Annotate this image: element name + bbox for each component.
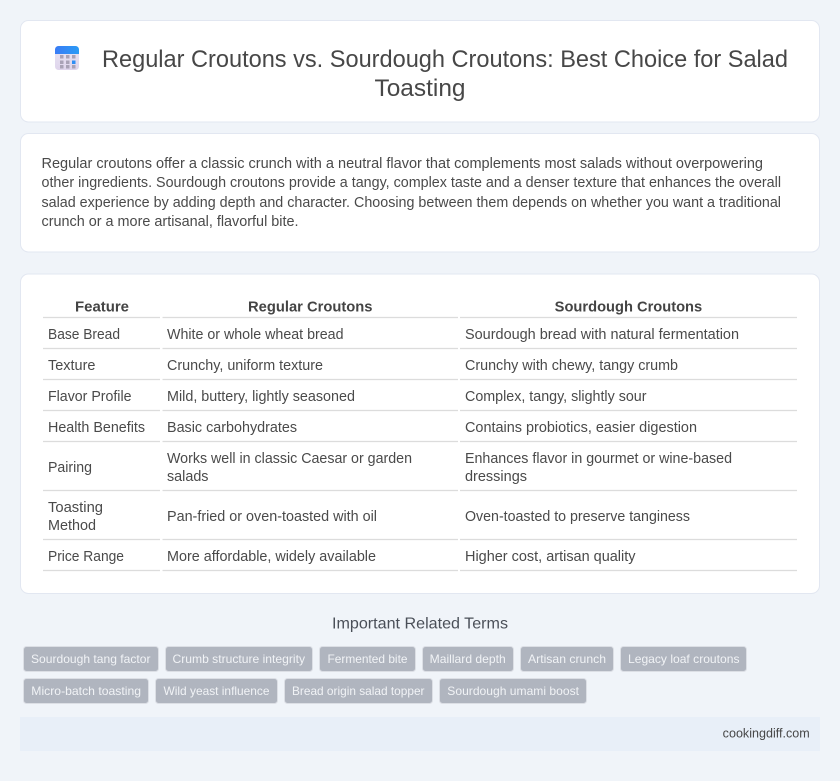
tag: artisan crunch xyxy=(520,646,614,672)
table header row: Sourdough Croutons xyxy=(555,300,702,316)
row: health benefits: Health Benefits xyxy=(48,420,145,436)
tag: bread origin salad topper: Bread origin salad topper xyxy=(292,684,424,698)
row: health benefits xyxy=(48,420,697,436)
tag: sourdough umami boost: Sourdough umami boost xyxy=(447,684,580,698)
heading: important related terms: Important Related Terms xyxy=(332,616,508,633)
row: pairing: Enhances flavor in gourmet or wine-based xyxy=(465,451,732,467)
row: toasting method: Pan-fried or oven-toasted with oil xyxy=(167,509,377,525)
row: flavor profile xyxy=(48,389,647,405)
table header row: Regular Croutons xyxy=(248,300,372,316)
panel: description xyxy=(20,134,820,252)
row: health benefits: Basic carbohydrates xyxy=(167,420,297,436)
tag: micro-batch toasting: Micro-batch toasting xyxy=(31,684,141,698)
tag: bread origin salad topper xyxy=(284,678,432,704)
row: texture: Texture xyxy=(48,358,96,374)
row: base bread: White or whole wheat bread xyxy=(167,327,344,343)
tag: fermented bite xyxy=(320,646,416,672)
description text: crunch or a more artisanal, flavorful bite. xyxy=(42,214,298,230)
row: base bread: Base Bread xyxy=(48,327,120,343)
tag: wild yeast influence xyxy=(156,678,278,704)
tag: micro-batch toasting xyxy=(24,678,148,704)
tag: maillard depth: Maillard depth xyxy=(430,652,506,666)
tag: sourdough tang factor: Sourdough tang factor xyxy=(31,652,150,666)
row: price range: Higher cost, artisan quality xyxy=(465,549,636,565)
footer: cookingdiff.com xyxy=(723,727,810,741)
tag: maillard depth xyxy=(422,646,514,672)
tag: crumb structure integrity xyxy=(166,646,312,672)
tag: fermented bite: Fermented bite xyxy=(328,652,408,666)
row: base bread: Sourdough bread with natural fermentation xyxy=(465,327,739,343)
title: Regular Croutons vs. Sourdough Croutons: Best Choice for Salad xyxy=(102,46,788,73)
row: pairing: dressings xyxy=(465,469,527,485)
row: toasting method: Toasting xyxy=(48,500,103,516)
footer xyxy=(20,717,820,751)
row: pairing: Pairing xyxy=(48,460,92,476)
row: pairing: salads xyxy=(167,469,208,485)
row: toasting method xyxy=(48,500,690,534)
row: pairing: Works well in classic Caesar or garden xyxy=(167,451,412,467)
tag: legacy loaf croutons xyxy=(620,646,746,672)
title: Toasting xyxy=(374,75,466,102)
row: price range: More affordable, widely available xyxy=(167,549,376,565)
panel: comparison table xyxy=(20,274,820,594)
table header row xyxy=(75,300,702,316)
row: flavor profile: Mild, buttery, lightly seasoned xyxy=(167,389,355,405)
row: health benefits: Contains probiotics, easier digestion xyxy=(465,420,697,436)
row: price range: Price Range xyxy=(48,549,124,565)
row: toasting method: Method xyxy=(48,518,96,534)
tags: related terms xyxy=(24,646,746,704)
description text: Regular croutons offer a classic crunch with a neutral flavor that complements most salads without overpowering xyxy=(42,156,763,172)
tag: crumb structure integrity: Crumb structure integrity xyxy=(172,652,305,666)
table header row: Feature xyxy=(75,300,129,316)
row: texture: Crunchy, uniform texture xyxy=(167,358,323,374)
tag: artisan crunch: Artisan crunch xyxy=(528,652,606,666)
row: price range xyxy=(48,549,636,565)
panel: title header xyxy=(20,20,820,122)
tag: sourdough tang factor xyxy=(24,646,158,672)
icon: calendar xyxy=(55,46,79,70)
description text xyxy=(42,156,781,230)
tag: legacy loaf croutons: Legacy loaf croutons xyxy=(628,652,740,666)
row: texture xyxy=(48,358,678,374)
row: toasting method: Oven-toasted to preserve tanginess xyxy=(465,509,690,525)
description text: other ingredients. Sourdough croutons provide a tangy, complex taste and a denser texture that enhances the overall xyxy=(42,175,781,191)
row: pairing xyxy=(48,451,732,485)
row: flavor profile: Complex, tangy, slightly sour xyxy=(465,389,647,405)
row: texture: Crunchy with chewy, tangy crumb xyxy=(465,358,678,374)
description text: salad experience by adding depth and character. Choosing between them depends on whether you want a traditional xyxy=(42,195,781,211)
row: flavor profile: Flavor Profile xyxy=(48,389,132,405)
row: base bread xyxy=(48,327,739,343)
tag: sourdough umami boost xyxy=(440,678,586,704)
title xyxy=(102,46,788,102)
tag: wild yeast influence: Wild yeast influence xyxy=(164,684,270,698)
